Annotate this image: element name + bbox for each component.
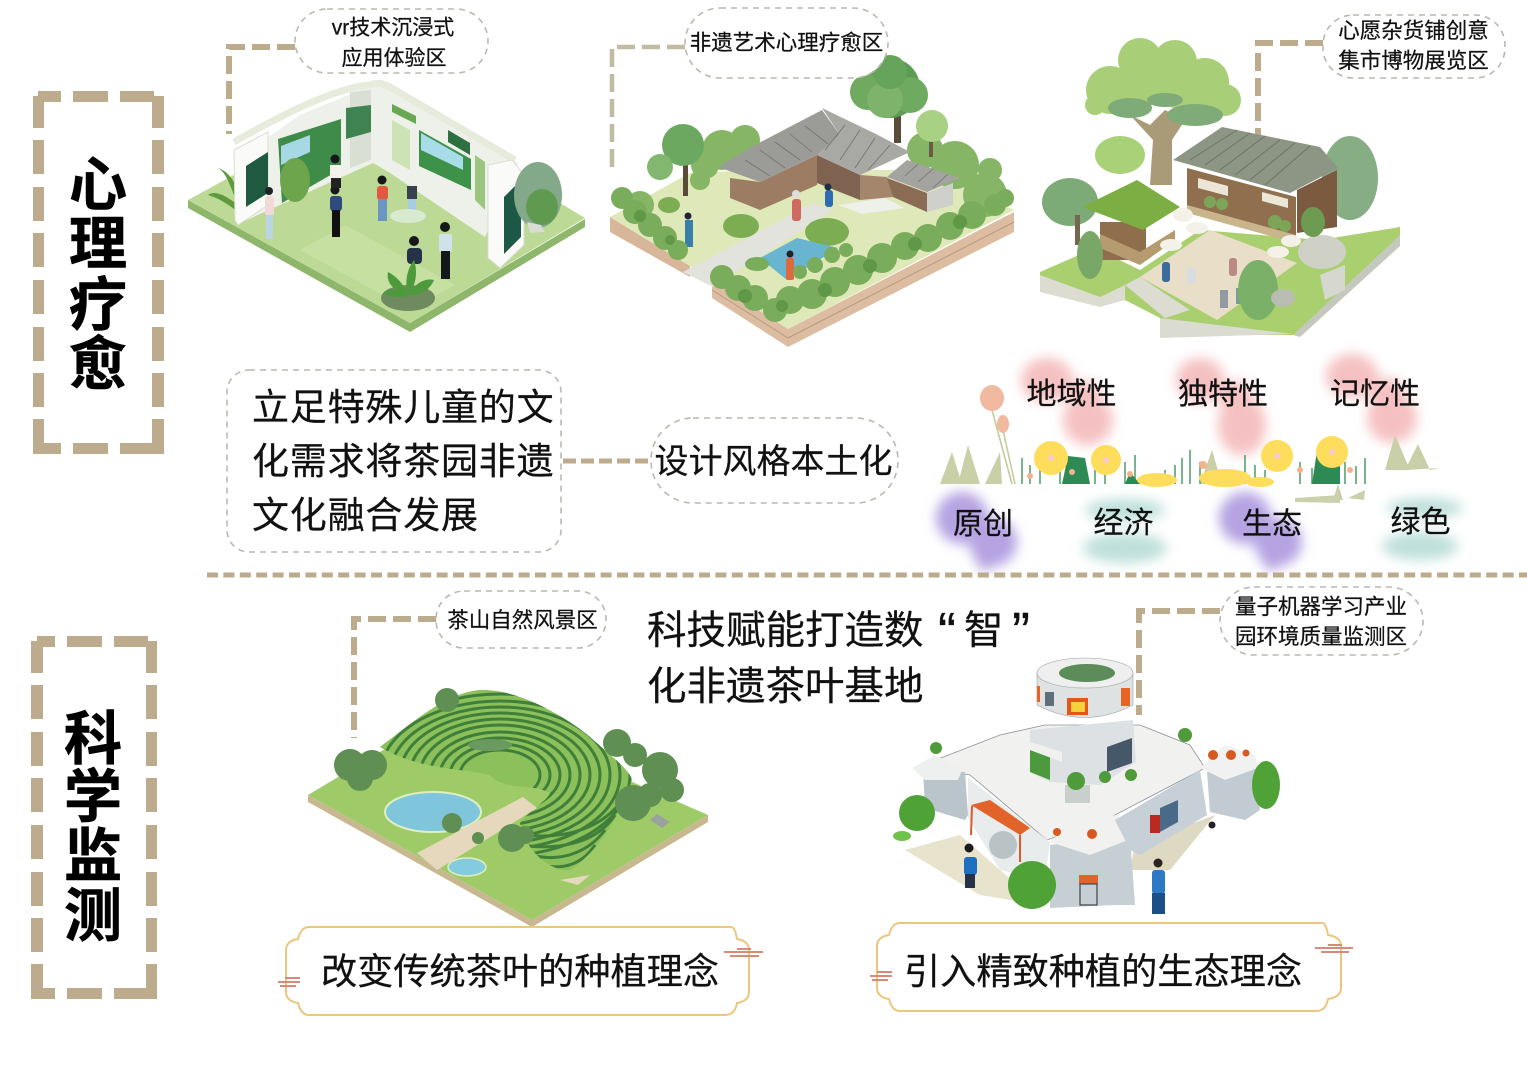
callout: heritage art therapy zone	[685, 8, 888, 78]
callout: heritage art therapy zone: 非遗艺术心理疗愈区	[690, 31, 883, 55]
callout: quantum monitoring zone	[1220, 587, 1423, 655]
plant left	[208, 168, 238, 209]
keyword labels: 绿色	[1390, 506, 1450, 539]
keyword labels: 记忆性	[1330, 378, 1420, 411]
scene: vr immersive experience zone	[188, 83, 585, 332]
ground	[1040, 227, 1400, 335]
hill	[380, 690, 632, 870]
keyword labels	[953, 378, 1450, 541]
heading frame: 科学监测: 科	[64, 707, 122, 772]
heading: technology-enabled heritage tea base: ”	[1012, 602, 1030, 662]
callout: tea mountain scenery zone	[436, 591, 606, 648]
heading frame: 心理疗愈: 理	[69, 212, 127, 277]
pots	[1053, 750, 1250, 839]
mid tower	[1030, 720, 1136, 785]
text box: cultural integration: 立足特殊儿童的文	[252, 387, 554, 428]
connector: text box to localized style	[563, 458, 650, 464]
pond	[760, 238, 838, 280]
people	[1162, 262, 1170, 282]
planter	[381, 285, 435, 311]
text box: cultural integration	[227, 370, 561, 552]
scene: heritage art therapy zone	[610, 55, 1014, 347]
heading frame: 心理疗愈: 心	[69, 153, 127, 218]
callout: localized design style: 设计风格本土化	[654, 443, 892, 481]
connector: wish grocery zone	[1258, 43, 1323, 135]
connector: heritage art therapy zone	[612, 47, 685, 174]
main divider	[207, 572, 1527, 578]
people	[265, 154, 452, 279]
right bushes	[514, 162, 562, 228]
pavilion	[1100, 222, 1146, 260]
walls	[968, 778, 1050, 880]
heading: technology-enabled heritage tea base: 化非遗茶叶基地	[647, 665, 924, 709]
scene: wish grocery market zone	[1040, 38, 1400, 338]
connector: tea mountain zone	[354, 619, 436, 738]
back walls	[236, 86, 519, 237]
trees	[334, 688, 684, 852]
callout: quantum monitoring zone: 园环境质量监测区	[1235, 625, 1407, 649]
text box: cultural integration: 化需求将茶园非遗	[252, 441, 554, 482]
callout: tea mountain scenery zone: 茶山自然风景区	[447, 608, 598, 632]
banner: change traditional planting concept	[278, 927, 763, 1015]
people	[964, 857, 977, 875]
tower	[1037, 673, 1133, 718]
bushes	[899, 761, 1280, 909]
planters	[1065, 785, 1090, 803]
courtyard	[1140, 230, 1297, 320]
callout: wish grocery zone: 心愿杂货铺创意	[1338, 19, 1489, 43]
heading frame: 科学监测	[31, 636, 157, 999]
lakes	[385, 792, 481, 832]
callout: wish grocery zone: 集市博物展览区	[1338, 49, 1489, 73]
keyword labels: 独特性	[1178, 378, 1268, 411]
text box: cultural integration: 文化融合发展	[252, 495, 479, 536]
callout: vr zone	[295, 9, 488, 73]
round shrubs	[723, 214, 759, 238]
orange canopy	[971, 800, 1030, 835]
keyword labels: 原创	[953, 508, 1013, 541]
rocks and bushes	[1298, 235, 1346, 269]
people	[792, 199, 801, 221]
connector: quantum monitoring zone	[1139, 611, 1220, 715]
connector: vr zone	[229, 47, 295, 134]
trees	[1042, 38, 1378, 245]
ground sides	[610, 217, 690, 277]
shop	[1297, 170, 1337, 233]
bastions	[923, 770, 968, 820]
heading: technology-enabled heritage tea base	[647, 602, 1030, 709]
flower strip	[940, 385, 1440, 503]
heading frame: 心理疗愈: 疗	[69, 273, 127, 338]
path	[683, 203, 833, 287]
banner: change traditional planting concept: 改变传统茶叶的种植理念	[321, 951, 719, 992]
trees	[647, 55, 948, 196]
keyword blobs: purple and teal	[936, 492, 1463, 570]
main roof	[915, 725, 1205, 840]
keyword labels: 地域性	[1026, 378, 1116, 411]
heading frame: 科学监测: 监	[64, 824, 122, 889]
ground	[905, 835, 1040, 905]
heading: technology-enabled heritage tea base: 智	[964, 609, 1004, 653]
heading: technology-enabled heritage tea base: 科技赋能打造数	[647, 609, 924, 653]
heading frame: 科学监测: 测	[64, 884, 122, 949]
back foliage	[626, 125, 1007, 219]
callout: vr zone: 应用体验区	[342, 47, 446, 70]
callout: vr zone: vr技术沉浸式	[332, 16, 454, 40]
keyword blobs: pink	[1021, 354, 1417, 455]
end panels	[234, 132, 268, 225]
heading frame: 心理疗愈	[33, 91, 164, 454]
callout: localized design style	[651, 418, 898, 503]
callout: quantum monitoring zone: 量子机器学习产业	[1235, 595, 1407, 619]
callout: wish grocery zone	[1323, 15, 1505, 78]
heading frame: 心理疗愈: 愈	[69, 332, 127, 397]
scene: tea mountain terraces	[308, 688, 708, 927]
walls	[730, 155, 817, 210]
roofs	[718, 110, 840, 182]
keyword labels: 生态	[1242, 508, 1302, 541]
keyword labels: 经济	[1094, 507, 1154, 540]
umbrellas	[1160, 208, 1301, 258]
scene: quantum monitoring station	[893, 658, 1280, 914]
banner: introduce precision ecological concept: 引入精致种植的生态理念	[904, 951, 1302, 992]
heading: technology-enabled heritage tea base: “	[938, 602, 956, 662]
banner: introduce precision ecological concept	[870, 923, 1353, 1011]
hedges	[611, 187, 1014, 322]
heading frame: 科学监测: 学	[64, 765, 122, 830]
path	[417, 797, 537, 870]
